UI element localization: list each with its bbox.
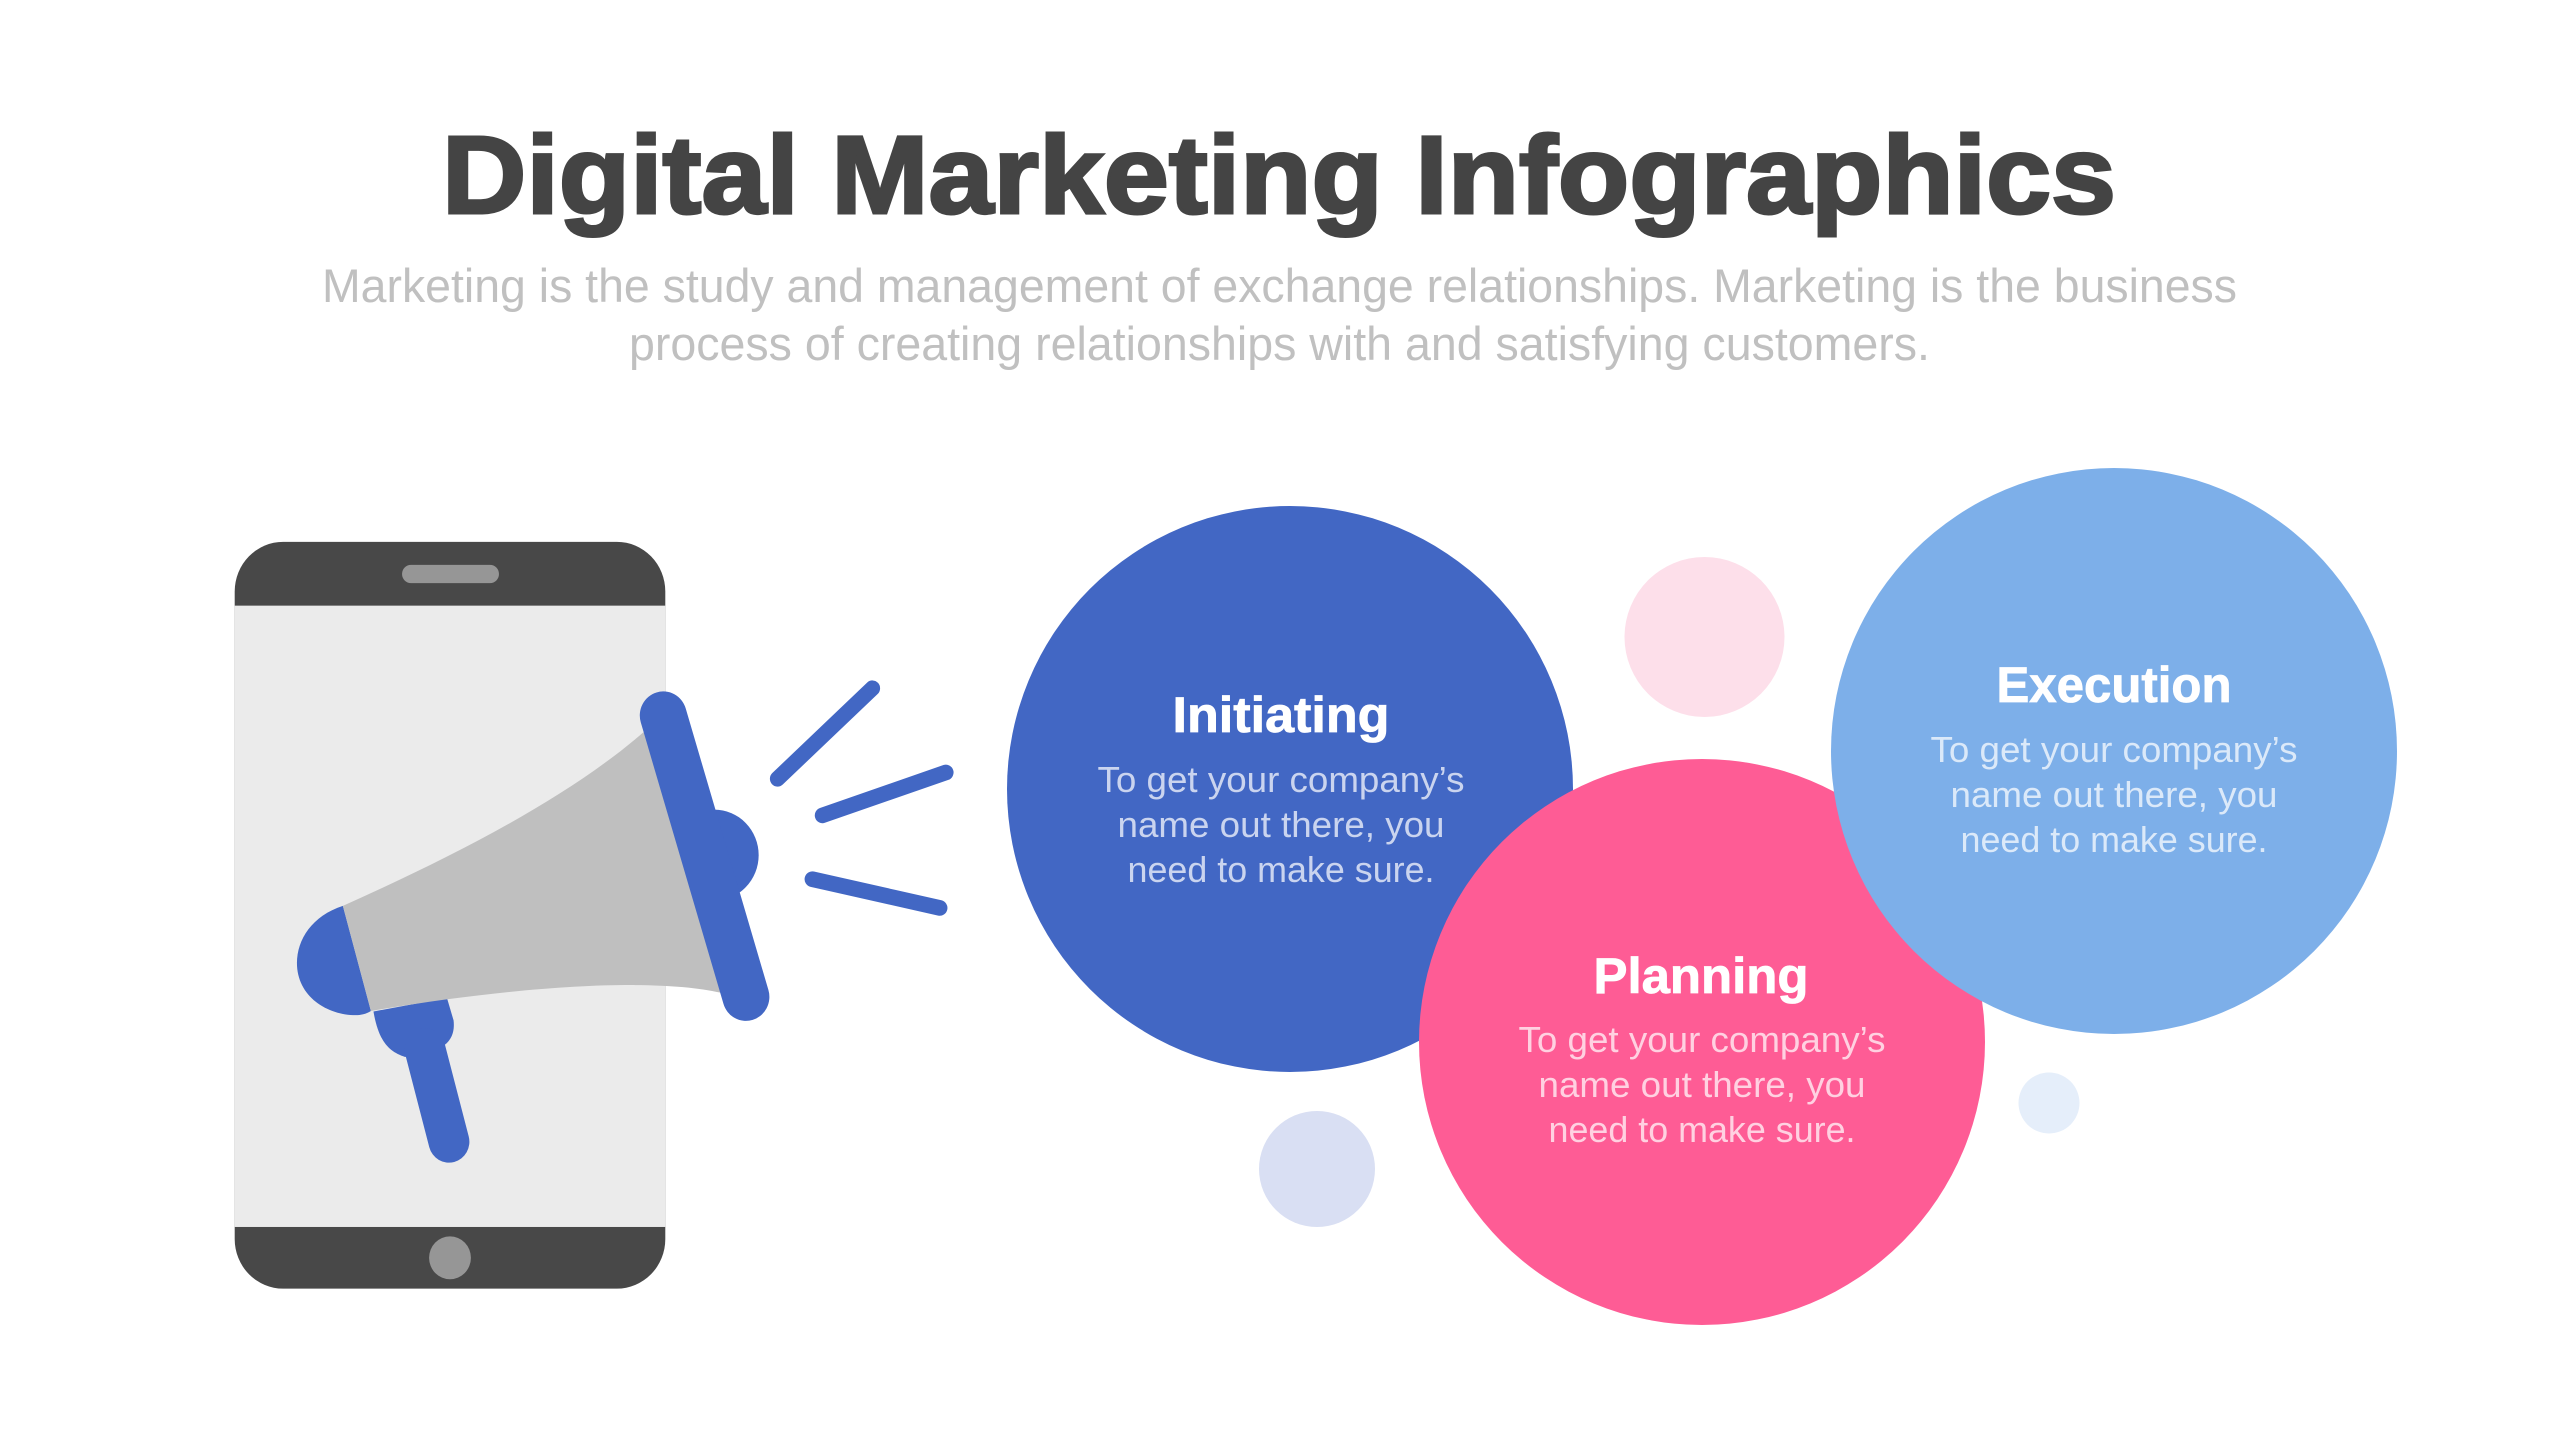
- body: planning: need to make sure.: [1548, 1109, 1856, 1150]
- heading: execution: Execution: [1996, 657, 2232, 713]
- panel: initiating: [1007, 506, 1573, 1072]
- decorative bubble: pale indigo: [1259, 1111, 1375, 1227]
- illustration: phone with megaphone: [235, 542, 946, 1289]
- sound lines: [778, 688, 946, 908]
- decorative bubble: pale blue: [2018, 1072, 2080, 1134]
- panel: planning: [1419, 759, 1985, 1325]
- body: planning: [1518, 1019, 1886, 1150]
- body: execution: [1930, 729, 2298, 860]
- heading: initiating: Initiating: [1172, 687, 1390, 743]
- body: initiating: need to make sure.: [1128, 849, 1434, 890]
- body: initiating: name out there, you: [1118, 804, 1444, 845]
- body: planning: To get your company’s: [1518, 1019, 1886, 1060]
- subtitle: process of creating relationships with and satisfying customers.: [629, 317, 1930, 370]
- phone body: [235, 542, 665, 1289]
- body: execution: name out there, you: [1950, 774, 2278, 815]
- body: execution: need to make sure.: [1960, 819, 2268, 860]
- decorative bubble: pink: [1624, 557, 1784, 717]
- body: initiating: To get your company’s: [1098, 759, 1464, 800]
- body: execution: To get your company’s: [1930, 729, 2298, 770]
- title: Digital Marketing Infographics: [442, 114, 2116, 237]
- subtitle: Marketing is the study and management of exchange relationships. Marketing is the business: [322, 259, 2237, 312]
- panel: execution: [1831, 468, 2397, 1034]
- body: planning: name out there, you: [1538, 1064, 1866, 1105]
- megaphone: [297, 715, 759, 1142]
- heading: planning: Planning: [1594, 948, 1808, 1004]
- subtitle: [322, 259, 2237, 370]
- body: initiating: [1098, 759, 1464, 890]
